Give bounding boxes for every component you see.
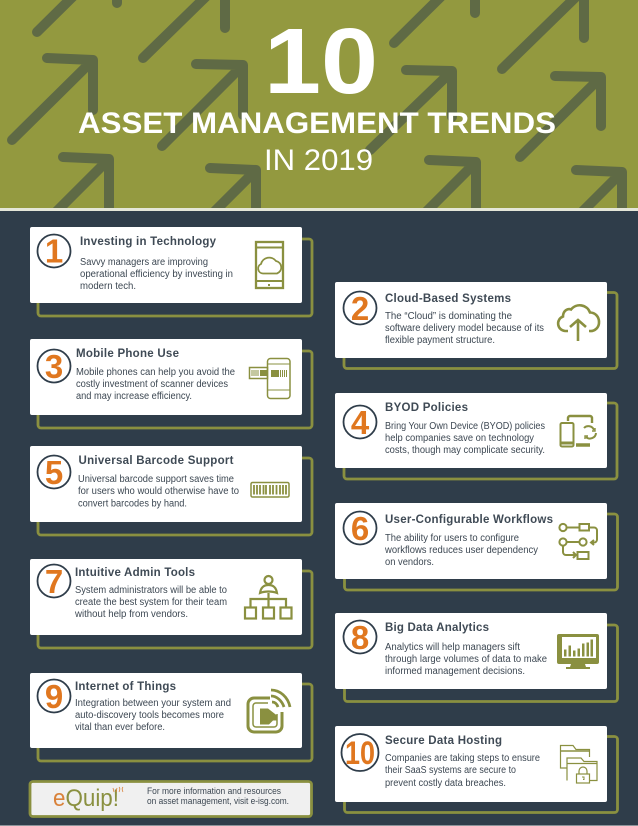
panel: trend 3: 3 [45, 348, 63, 385]
panel: trend 2 [335, 282, 617, 368]
panel: trend 9: Integration between your system and [75, 698, 231, 709]
panel: trend 8: Big Data Analytics [385, 622, 489, 634]
panel: trend 6: The ability for users to configure [385, 533, 519, 544]
panel: trend 3 [30, 339, 312, 428]
panel: trend 1: 1 [45, 232, 63, 270]
icon: cloud upload [558, 305, 599, 341]
logo: eQuip: eQuip! [53, 785, 119, 812]
panel: trend 9 [30, 673, 312, 761]
panel: trend 2: Cloud-Based Systems [385, 293, 511, 305]
panel: trend 8: informed management decisions. [385, 666, 525, 677]
panel: trend 1 [30, 227, 312, 316]
footer text: For more information and resources [147, 786, 281, 797]
panel: trend 10 [335, 726, 618, 812]
panel: trend 4: Bring Your Own Device (BYOD) policies [385, 421, 545, 432]
panel: trend 5: 5 [45, 454, 63, 491]
title: asset management trends: ASSET MANAGEMENT TRENDS [78, 107, 556, 140]
panel: trend 4: 4 [351, 404, 370, 441]
panel: trend 3: Mobile Phone Use [76, 348, 179, 360]
panel: trend 7: without help from vendors. [74, 609, 188, 620]
panel: trend 3: costly investment of scanner devices [76, 379, 228, 390]
panel: trend 1: operational efficiency by investing in [80, 269, 233, 280]
panel: trend 9: 9 [45, 678, 63, 715]
panel: trend 10: Secure Data Hosting [385, 735, 502, 747]
icon: devices sync [560, 416, 596, 446]
panel: trend 6: 6 [351, 510, 369, 547]
icon: phone with cloud [256, 242, 283, 288]
icon: IoT chip with signal [248, 690, 290, 732]
title: 10: 10 [264, 9, 378, 113]
icon: org chart [245, 576, 292, 618]
panel: trend 8 [335, 613, 618, 702]
panel: trend 7: 7 [45, 563, 63, 600]
icon: phone scanning barcode [250, 358, 290, 398]
icon: barcode [251, 482, 289, 497]
panel: trend 2: flexible payment structure. [385, 335, 495, 346]
icon: workflow diagram [559, 524, 597, 559]
panel: trend 2: software delivery model because of its [385, 323, 544, 334]
panel: trend 6: User-Configurable Workflows [385, 514, 553, 526]
panel: trend 8: 8 [351, 619, 369, 656]
panel: trend 5: Universal Barcode Support [78, 455, 234, 467]
footer text: on asset management, visit e-isg.com. [147, 796, 289, 807]
panel: trend 1: modern tech. [80, 281, 136, 292]
header banner with arrows [0, 0, 638, 253]
panel: trend 9: vital than ever before. [75, 722, 165, 733]
panel: trend 10: Companies are taking steps to ensure [385, 753, 540, 764]
panel: trend 3: Mobile phones can help you avoid the [76, 367, 235, 378]
panel: trend 5: for users who would otherwise have to [78, 486, 239, 497]
panel: trend 6: workflows reduces user dependency [384, 545, 538, 556]
panel: trend 4: help companies save on technology [385, 433, 534, 444]
panel: trend 5: convert barcodes by hand. [78, 498, 187, 510]
panel: trend 7: System administrators will be able to [75, 585, 227, 596]
panel: trend 5: Universal barcode support saves time [78, 474, 234, 485]
panel: trend 6: on vendors. [385, 557, 434, 568]
panel: trend 6 [335, 503, 618, 590]
panel: trend 2: 2 [351, 290, 369, 327]
subtitle: in 2019: IN 2019 [264, 144, 373, 177]
panel: trend 2: The “Cloud” is dominating the [385, 311, 512, 322]
panel: trend 8: through large volumes of data to make [385, 654, 547, 665]
panel: trend 4: BYOD Policies [385, 402, 468, 414]
panel: trend 4: costs, though may complicate security. [385, 445, 545, 456]
panel: trend 9: auto-discovery tools becomes more [75, 710, 224, 721]
panel: trend 7: Intuitive Admin Tools [75, 567, 195, 579]
panel: trend 5 [30, 446, 312, 535]
panel: trend 10: their SaaS systems are secure to [385, 765, 516, 776]
panel: trend 9: Internet of Things [75, 681, 176, 693]
panel: trend 8: Analytics will help managers sift [385, 642, 520, 653]
panel: trend 3: and may increase efficiency. [76, 391, 192, 402]
panel: trend 10: prevent costly data breaches. [385, 778, 506, 789]
panel: trend 7 [30, 559, 312, 648]
footer text [147, 786, 289, 807]
icon: locked folders [560, 746, 597, 783]
panel: trend 4 [335, 393, 617, 479]
panel: trend 1: Savvy managers are improving [80, 257, 208, 268]
panel: trend 10: 10 [345, 735, 375, 771]
panel: trend 1: Investing in Technology [80, 236, 217, 248]
footer callout with logo [30, 782, 312, 816]
icon: analytics monitor [557, 634, 599, 669]
panel: trend 7: create the best system for their team [75, 597, 227, 608]
